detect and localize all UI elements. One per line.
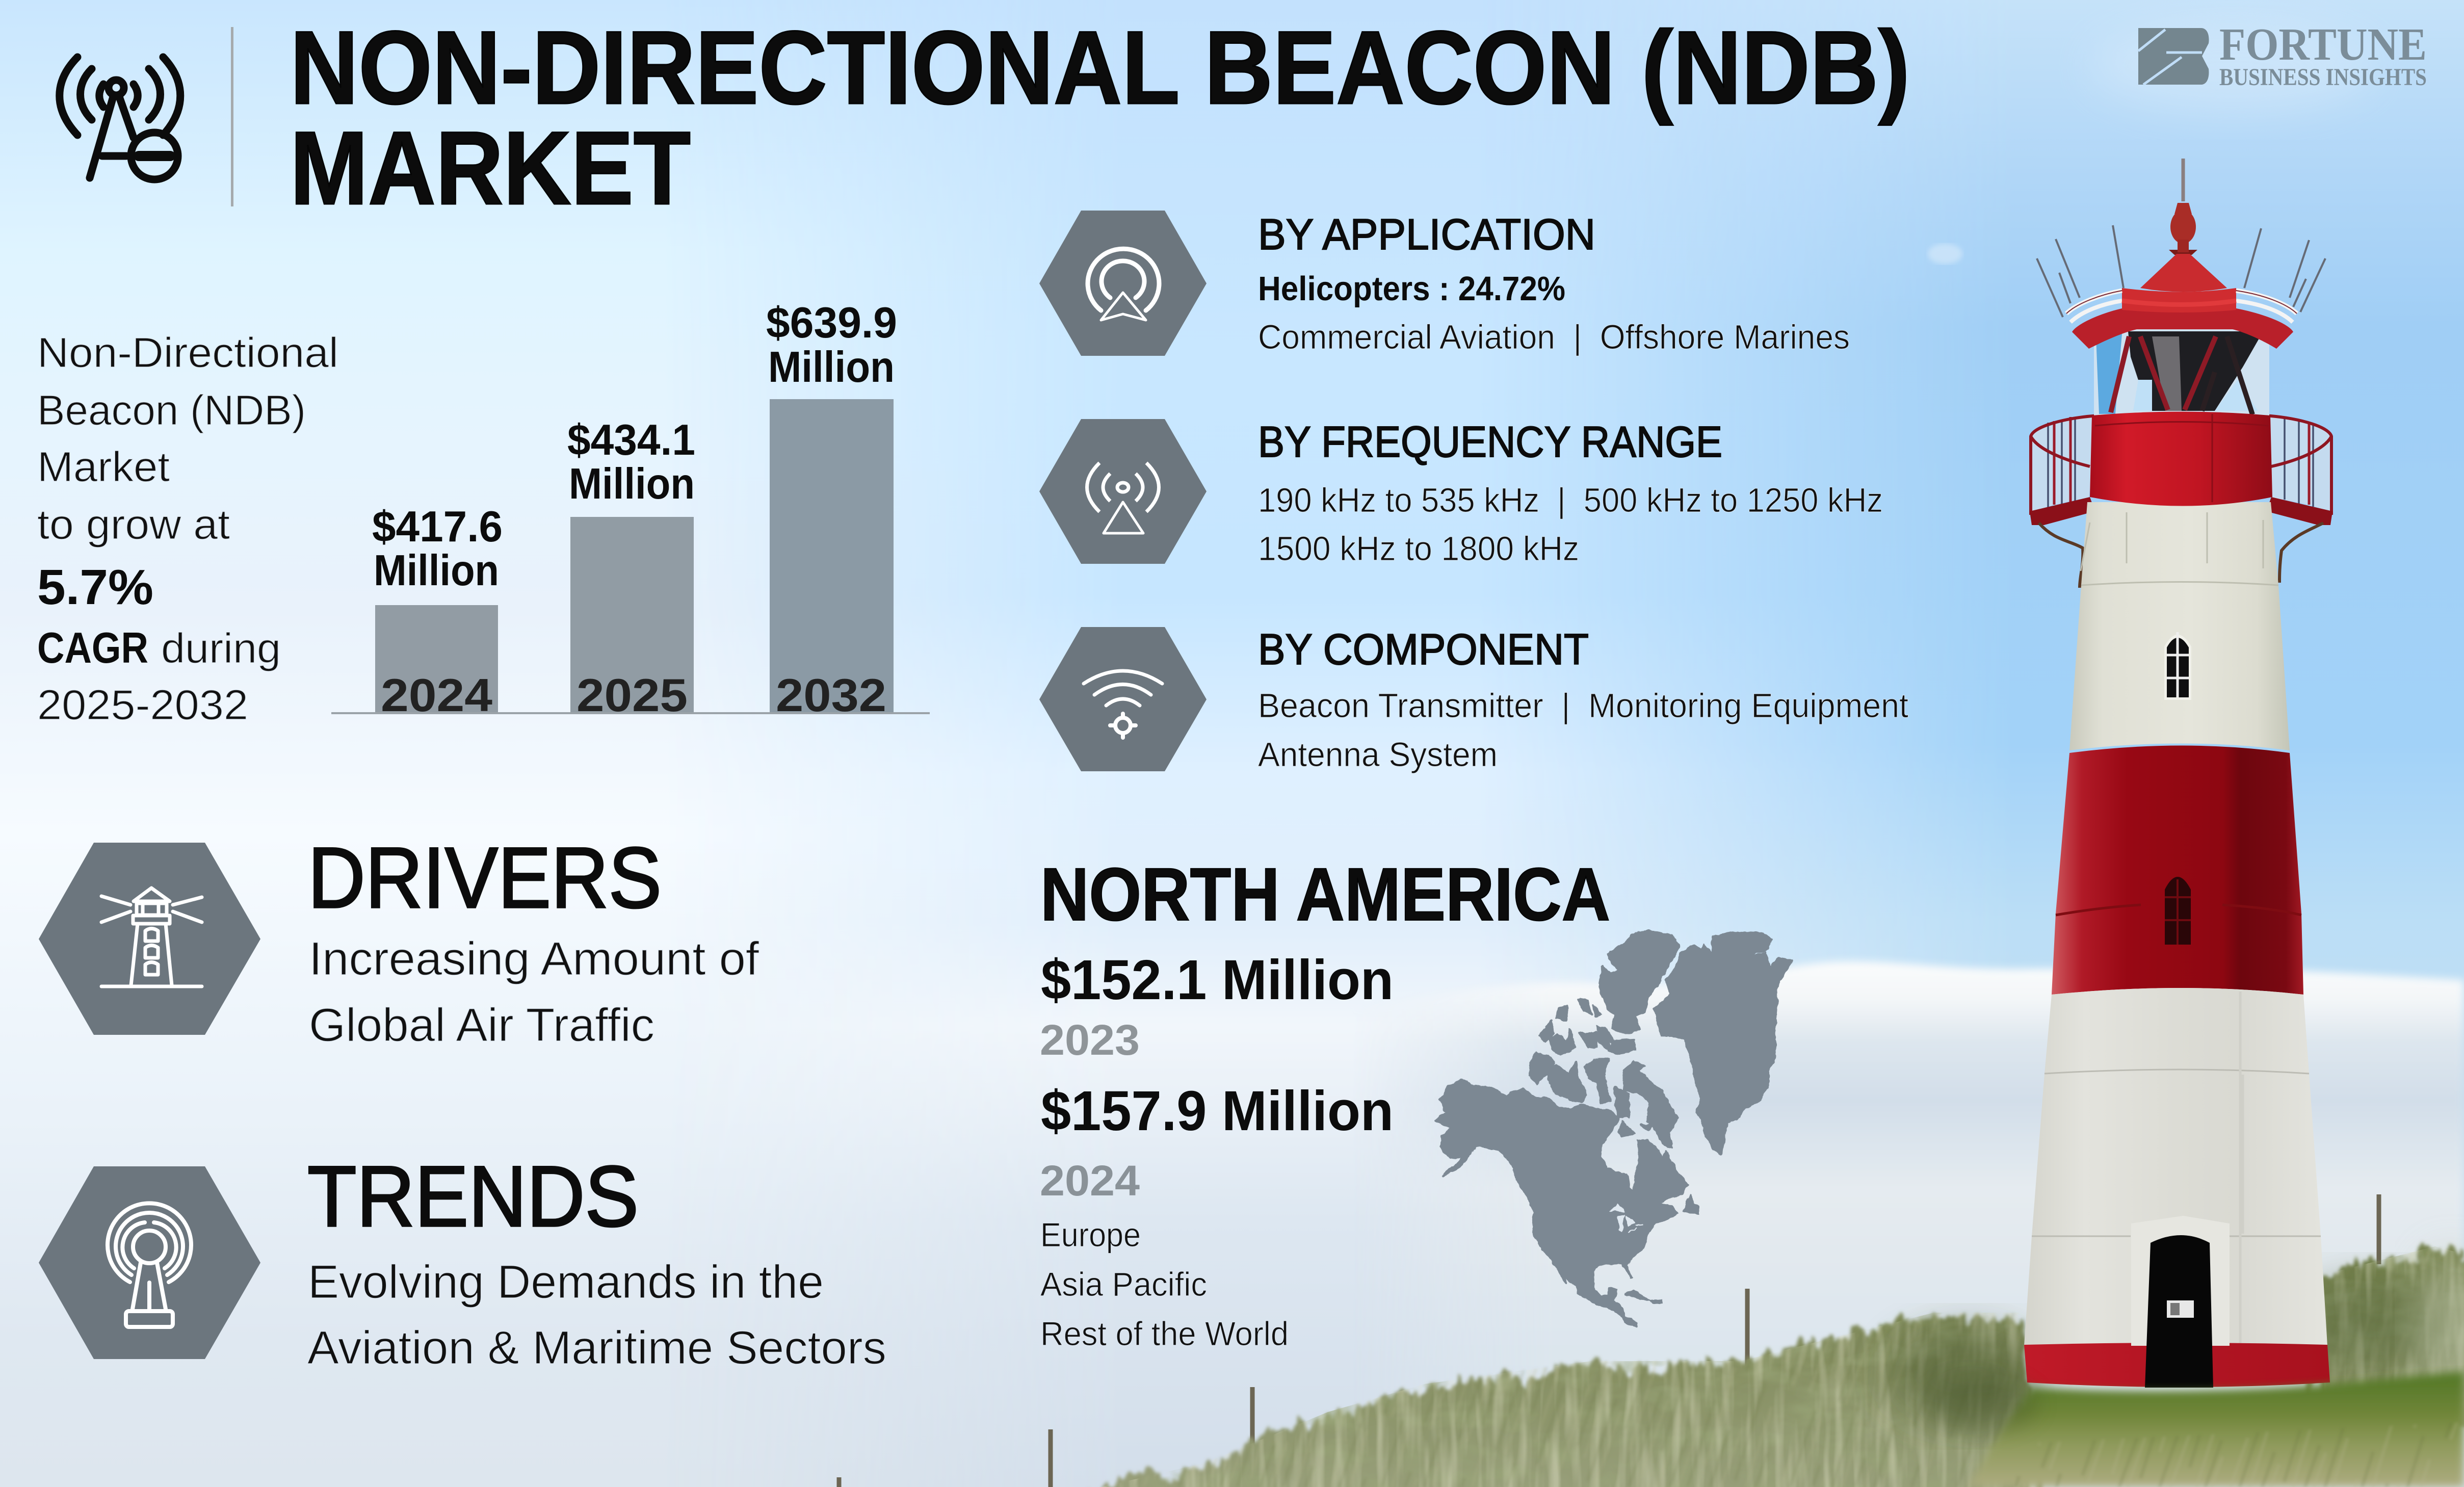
growth summary text: 5.7%: [37, 559, 153, 615]
lighthouse lantern room: [2094, 329, 2269, 415]
panel: by component: BY COMPONENT: [1258, 625, 1589, 674]
upper tower window: [2164, 632, 2191, 700]
icon: lighthouse hexagon: [39, 843, 260, 1035]
growth summary text: 2025-2032: [37, 681, 248, 728]
lower tower window: [2165, 877, 2191, 945]
growth summary text: Non-Directional: [37, 329, 338, 376]
dune grass and fence posts behind lighthouse: [839, 1194, 2464, 1487]
lighthouse roof and finial: [2066, 159, 2297, 349]
lighthouse lower white section: [2024, 988, 2327, 1346]
panel: trends: TRENDS: [307, 1148, 639, 1244]
lighthouse red drum: [2090, 412, 2272, 506]
panel: regional insight: $157.9 Million: [1041, 1080, 1394, 1142]
lighthouse: [2024, 159, 2332, 1388]
lighthouse upper cream section: [2069, 502, 2290, 750]
bar 2024: 2024: [381, 670, 492, 721]
title: NON-DIRECTIONAL BEACON (NDB): [290, 10, 1910, 126]
logo: Fortune Business Insights: [2138, 19, 2427, 91]
panel: regional insight: $152.1 Million: [1041, 949, 1394, 1011]
panel: trends: Evolving Demands in the: [308, 1256, 824, 1308]
growth summary text: Beacon (NDB): [37, 386, 306, 434]
growth summary text: to grow at: [37, 501, 230, 548]
title: MARKET: [290, 110, 691, 226]
panel: regional insight: 2023: [1040, 1016, 1140, 1064]
panel: by component: Antenna System: [1258, 736, 1498, 774]
map: North America: [1436, 930, 1792, 1326]
panel: drivers: Global Air Traffic: [309, 999, 654, 1051]
panel: by component: Beacon Transmitter | Monitoring Equipment: [1258, 687, 1908, 725]
lighthouse red band: [2052, 745, 2303, 995]
bar 2024: $417.6: [372, 503, 503, 551]
bar 2032: Million: [768, 343, 895, 392]
logo: Fortune Business Insights: FORTUNE: [2219, 19, 2427, 70]
bar 2032: 2032: [776, 670, 886, 721]
panel: regional insight: Europe: [1040, 1216, 1141, 1254]
icon: radio beacon hexagon: [1039, 419, 1207, 564]
panel: regional insight: Rest of the World: [1040, 1315, 1289, 1352]
panel: trends: [39, 1148, 886, 1374]
growth summary text: CAGR: [37, 624, 148, 672]
lighthouse lantern antenna rods: [2037, 225, 2325, 317]
growth summary text: Market: [37, 443, 170, 490]
growth summary text: [37, 329, 338, 728]
panel: regional insight: [1040, 853, 1610, 1352]
growth summary text: during: [161, 624, 281, 672]
header divider: [231, 27, 233, 206]
panel: by application: Commercial Aviation | Offshore Marines: [1258, 318, 1850, 356]
bar 2025: [567, 416, 695, 721]
bar 2032: [766, 299, 897, 721]
lighthouse gallery railing: [2030, 415, 2332, 588]
panel: by application: [1039, 211, 1850, 356]
icon: beacon tower with signal waves: [60, 57, 180, 179]
bar chart: market size: [331, 299, 930, 721]
door: [2131, 1216, 2230, 1388]
bar 2024: [372, 503, 503, 721]
panel: regional insight: 2024: [1040, 1157, 1140, 1205]
icon: wifi target hexagon: [1039, 627, 1207, 771]
title: [290, 10, 1910, 226]
logo: Fortune Business Insights: BUSINESS INSIGHTS: [2219, 64, 2427, 91]
logo mark: [2138, 28, 2209, 85]
lawn in front of lighthouse: [1927, 1371, 2464, 1487]
panel: drivers: [39, 829, 759, 1051]
panel: by application: Helicopters : 24.72%: [1258, 270, 1565, 308]
bar 2025: 2025: [576, 670, 688, 721]
panel: trends: Aviation & Maritime Sectors: [307, 1322, 886, 1374]
panel: drivers: DRIVERS: [308, 829, 662, 926]
panel: by frequency range: [1039, 418, 1883, 568]
bar 2025: $434.1: [567, 416, 695, 464]
panel: by component: [1039, 625, 1908, 774]
panel: drivers: Increasing Amount of: [309, 933, 759, 985]
lighthouse red base: [2024, 1343, 2330, 1387]
panel: by application: BY APPLICATION: [1258, 211, 1595, 259]
bar 2032: $639.9: [766, 299, 897, 347]
panel: regional insight: NORTH AMERICA: [1040, 853, 1610, 936]
panel: regional insight: Asia Pacific: [1040, 1265, 1207, 1303]
panel: by frequency range: BY FREQUENCY RANGE: [1258, 418, 1722, 466]
bar 2024: Million: [374, 546, 499, 595]
icon: signal arrow hexagon: [1039, 211, 1207, 356]
bar 2025: Million: [569, 460, 695, 508]
panel: by frequency range: 190 kHz to 535 kHz | 500 kHz to 1250 kHz: [1258, 481, 1883, 519]
icon: broadcast tower hexagon: [39, 1166, 260, 1359]
panel: by frequency range: 1500 kHz to 1800 kHz: [1258, 530, 1579, 568]
